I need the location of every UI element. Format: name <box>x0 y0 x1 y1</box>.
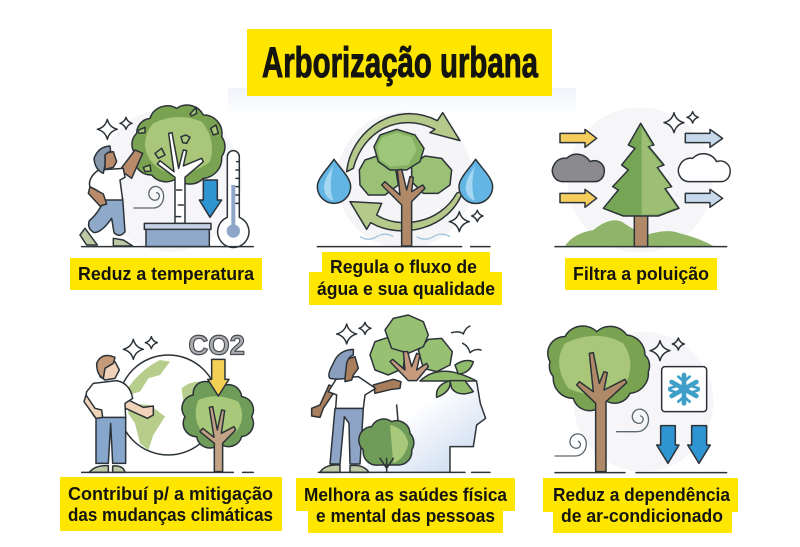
ground <box>82 470 253 475</box>
label <box>296 478 515 533</box>
panel: reduz dependencia de ar-condicionado <box>543 326 738 533</box>
title: Arborização urbana <box>262 39 539 87</box>
icon: wind swirls <box>555 409 649 456</box>
label: Reduz a temperatura <box>78 264 255 284</box>
icon: grey cloud <box>552 154 604 182</box>
label: das mudanças climáticas <box>68 505 273 525</box>
icon: birds <box>452 326 481 353</box>
panel: regula o fluxo de agua <box>309 112 502 305</box>
person <box>80 146 143 246</box>
label: e mental das pessoas <box>316 506 495 526</box>
title <box>247 29 552 96</box>
icon: sparkles <box>664 112 698 133</box>
icon: sparkles <box>97 117 132 139</box>
label: de ar-condicionado <box>561 506 723 526</box>
planter <box>144 223 211 247</box>
label: Filtra a poluição <box>573 264 709 284</box>
icon: thermometer <box>218 151 249 247</box>
label <box>543 478 738 533</box>
label <box>565 258 717 290</box>
tree <box>359 129 452 246</box>
icon: blue arrow down <box>199 180 222 217</box>
icon: white cloud <box>678 154 730 182</box>
ground <box>317 244 490 249</box>
label: Regula o fluxo de <box>330 257 477 277</box>
label <box>60 477 282 531</box>
panel: reduz a temperatura <box>70 105 262 290</box>
bottom cycle arrow <box>350 190 463 231</box>
icon: sparkles <box>337 322 371 344</box>
text: CO2: CO2 <box>188 329 245 360</box>
head outline <box>397 382 486 472</box>
leaves <box>420 361 477 397</box>
illustration: globe, person and CO2 <box>82 329 253 472</box>
ground <box>82 244 253 249</box>
ground <box>555 244 727 249</box>
illustration: person watering tree and thermometer <box>80 105 253 252</box>
tree <box>548 326 650 472</box>
icon: blue arrows <box>685 129 723 207</box>
head silhouette <box>367 382 486 472</box>
illustration: water cycle tree <box>317 112 493 248</box>
label: Reduz a dependência <box>553 485 731 505</box>
panel: filtra a poluicao <box>552 107 730 290</box>
icon: sparkles <box>123 337 157 359</box>
person <box>312 349 401 472</box>
bush <box>359 419 414 472</box>
tree trunk <box>157 133 203 223</box>
panel: saude fisica e mental <box>296 315 515 533</box>
icon: sparkles <box>650 338 684 361</box>
icon: wind <box>134 186 164 208</box>
tree crown <box>132 105 225 184</box>
icon: blue arrows down <box>657 426 710 463</box>
person <box>84 355 153 472</box>
illustration: person, head and trees <box>312 315 490 472</box>
trees on head <box>370 315 452 381</box>
panel: mitigacao das mudancas climaticas <box>60 329 282 531</box>
label: Melhora as saúdes física <box>304 485 508 505</box>
top cycle arrow <box>347 113 460 172</box>
icon: yellow arrows <box>560 129 597 207</box>
label <box>70 258 262 290</box>
icon: water drops <box>317 159 493 203</box>
illustration: tree and air conditioner <box>548 326 727 473</box>
tree <box>182 382 253 472</box>
icon: sparkles <box>449 210 483 232</box>
label: Contribuí p/ a mitigação <box>68 484 273 504</box>
icon: yellow arrow down <box>208 359 229 396</box>
water ripples <box>360 234 450 239</box>
icon: air conditioner with snowflake <box>662 367 707 412</box>
illustration: pine filtering air <box>552 107 730 253</box>
ground <box>318 470 490 475</box>
label <box>309 252 502 305</box>
label: água e sua qualidade <box>317 279 495 299</box>
hills <box>565 220 713 246</box>
pine tree <box>603 123 679 247</box>
ground <box>555 470 727 475</box>
globe <box>118 355 218 455</box>
